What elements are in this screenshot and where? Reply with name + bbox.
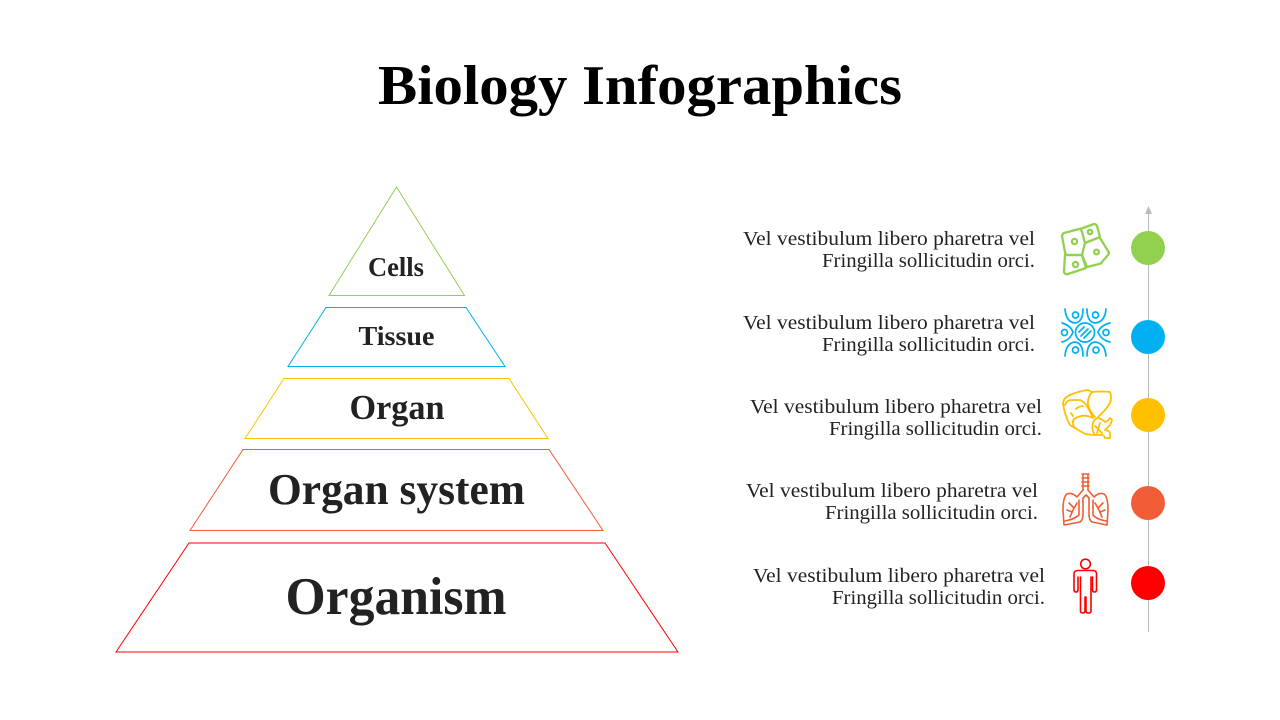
pyramid level: tissue: Tissue <box>358 321 435 351</box>
text block 2 <box>743 312 1035 356</box>
text block 1: Vel vestibulum libero pharetra vel <box>743 228 1035 250</box>
text block 4: Vel vestibulum libero pharetra vel <box>746 480 1038 502</box>
text block 5: Vel vestibulum libero pharetra vel <box>753 565 1045 587</box>
pyramid level: organ: Organ <box>350 388 444 427</box>
text block 5: Fringilla sollicitudin orci. <box>832 587 1045 609</box>
pyramid level: cells <box>329 187 464 296</box>
text block 1 <box>743 228 1035 272</box>
text block 2: Vel vestibulum libero pharetra vel <box>743 312 1035 334</box>
icon: cells <box>1062 224 1109 274</box>
text block 3: Fringilla sollicitudin orci. <box>829 418 1042 440</box>
dot: orange <box>1131 486 1165 520</box>
icon: liver and stomach <box>1063 390 1112 438</box>
icon: lungs <box>1063 474 1108 525</box>
pyramid <box>116 187 678 652</box>
pyramid level: cells: Cells <box>368 252 424 282</box>
text block 1: Fringilla sollicitudin orci. <box>822 250 1035 272</box>
pyramid level: organ system <box>190 450 603 530</box>
icon: tissue <box>1062 309 1110 356</box>
text block 3 <box>750 396 1042 440</box>
dot: yellow <box>1131 398 1165 432</box>
pyramid level: organism <box>116 543 678 652</box>
text block 4: Fringilla sollicitudin orci. <box>825 502 1038 524</box>
pyramid level: organ <box>245 378 548 438</box>
pyramid level: organism: Organism <box>286 568 506 626</box>
dot: green <box>1131 231 1165 265</box>
text block 4 <box>746 480 1038 524</box>
icon: human body <box>1074 559 1096 613</box>
title: Biology Infographics <box>378 55 902 117</box>
pyramid level: tissue <box>288 308 505 366</box>
text block 2: Fringilla sollicitudin orci. <box>822 334 1035 356</box>
pyramid level: organ system: Organ system <box>268 465 525 514</box>
dot: blue <box>1131 320 1165 354</box>
text block 5 <box>753 565 1045 609</box>
timeline arrow <box>1145 206 1152 632</box>
text block 3: Vel vestibulum libero pharetra vel <box>750 396 1042 418</box>
dot: red <box>1131 566 1165 600</box>
